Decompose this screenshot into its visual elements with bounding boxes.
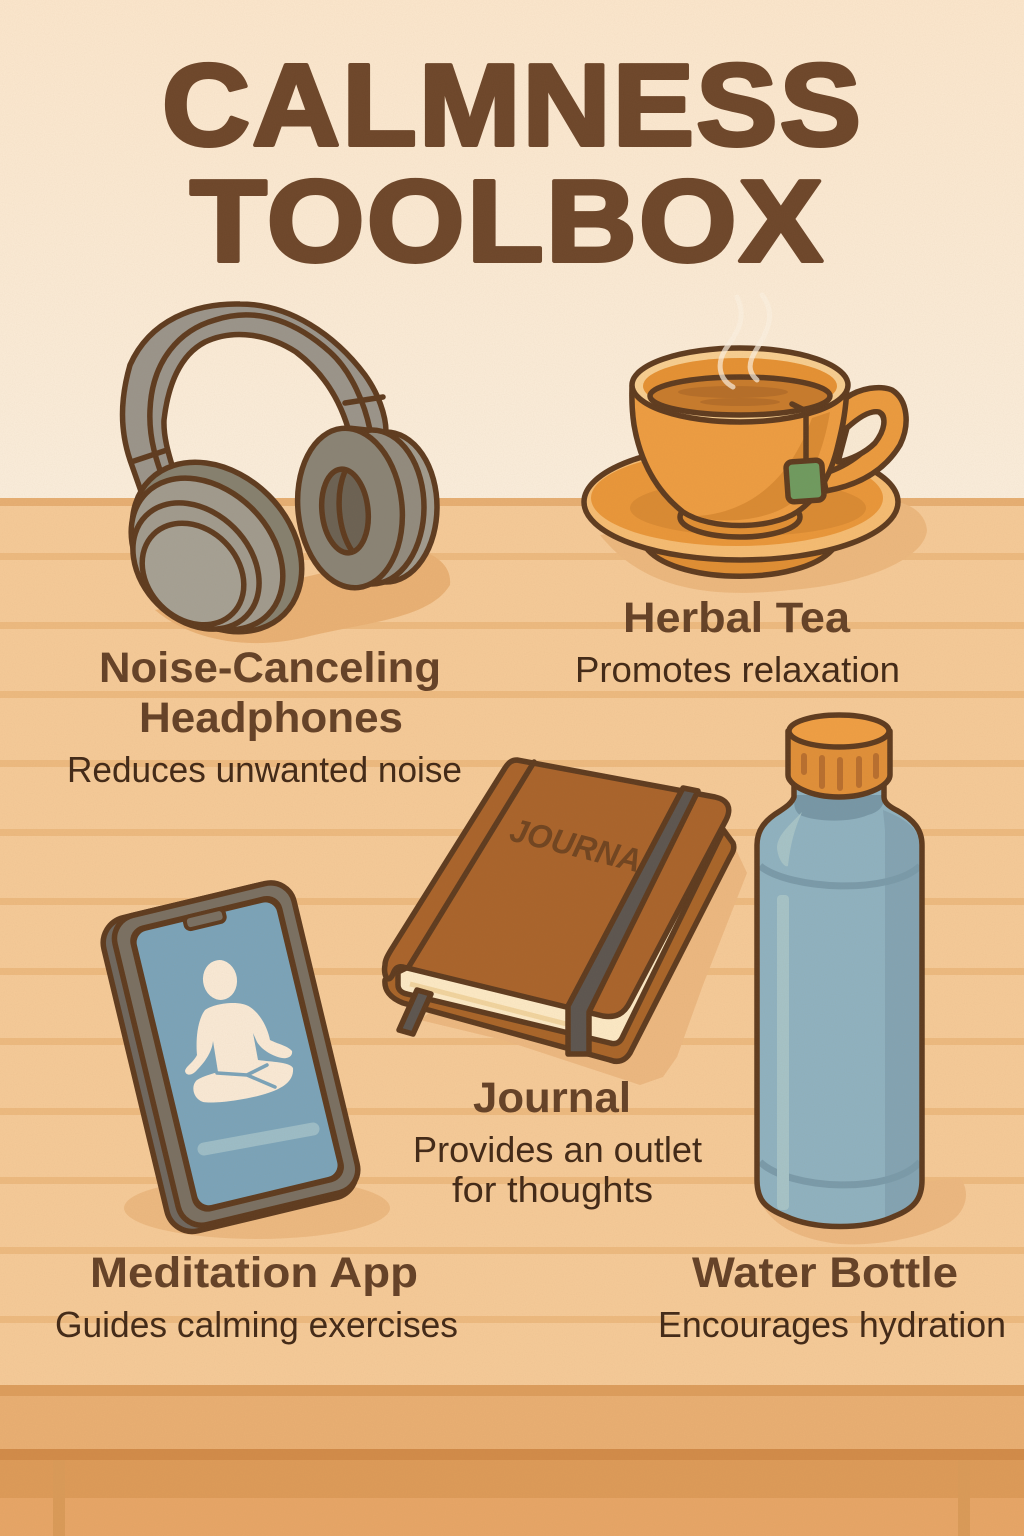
ribbon bookmark bbox=[399, 990, 431, 1034]
headband bbox=[122, 304, 386, 505]
label: journal: Provides an outlet bbox=[413, 1129, 702, 1170]
handle bbox=[823, 388, 906, 491]
progress bar bbox=[204, 1129, 313, 1149]
back cover bbox=[385, 828, 734, 1061]
label: meditation app: Guides calming exercises bbox=[55, 1304, 458, 1345]
elastic band bbox=[568, 788, 698, 1054]
icon: water bottle bbox=[757, 715, 966, 1244]
steam bbox=[720, 297, 741, 387]
title bbox=[162, 40, 863, 286]
label: meditation app: Meditation App bbox=[90, 1249, 418, 1297]
label: water bottle bbox=[658, 1249, 1006, 1345]
left ear cup bbox=[98, 428, 336, 666]
bottle cap bbox=[788, 731, 890, 797]
label: noise-canceling headphones bbox=[67, 644, 462, 790]
title: CALMNESS bbox=[162, 40, 863, 170]
notch bbox=[184, 908, 226, 930]
cup bbox=[632, 386, 847, 526]
pages bbox=[398, 815, 722, 1044]
label: journal bbox=[413, 1074, 702, 1210]
label: meditation app bbox=[55, 1249, 458, 1345]
icon: journal bbox=[385, 760, 747, 1085]
background: wooden table bbox=[0, 498, 1024, 1536]
cup foot bbox=[680, 497, 800, 537]
label: noise-canceling headphones: Headphones bbox=[139, 694, 403, 742]
label: water bottle: Water Bottle bbox=[692, 1249, 958, 1297]
saucer bbox=[648, 550, 832, 576]
label: water bottle: Encourages hydration bbox=[658, 1304, 1006, 1345]
icon: phone with meditation app bbox=[98, 878, 390, 1239]
tea bag bbox=[792, 404, 806, 460]
background: wall bbox=[0, 0, 1024, 500]
meditating figure bbox=[185, 958, 293, 1103]
label: herbal tea bbox=[575, 594, 900, 690]
label: herbal tea: Promotes relaxation bbox=[575, 649, 900, 690]
label: noise-canceling headphones: Noise-Canceling bbox=[99, 644, 441, 692]
bottle body bbox=[757, 785, 922, 1226]
title: TOOLBOX bbox=[190, 156, 825, 286]
icon: herbal tea cup bbox=[584, 295, 927, 593]
icon: headphones bbox=[98, 304, 450, 666]
right ear cup bbox=[335, 432, 437, 582]
label: herbal tea: Herbal Tea bbox=[623, 594, 851, 642]
label: noise-canceling headphones: Reduces unwanted noise bbox=[67, 749, 462, 790]
label: journal: Journal bbox=[473, 1074, 631, 1122]
cover bbox=[385, 760, 729, 1016]
journal cover text: JOURNA bbox=[506, 811, 645, 879]
label: journal: for thoughts bbox=[452, 1169, 653, 1210]
